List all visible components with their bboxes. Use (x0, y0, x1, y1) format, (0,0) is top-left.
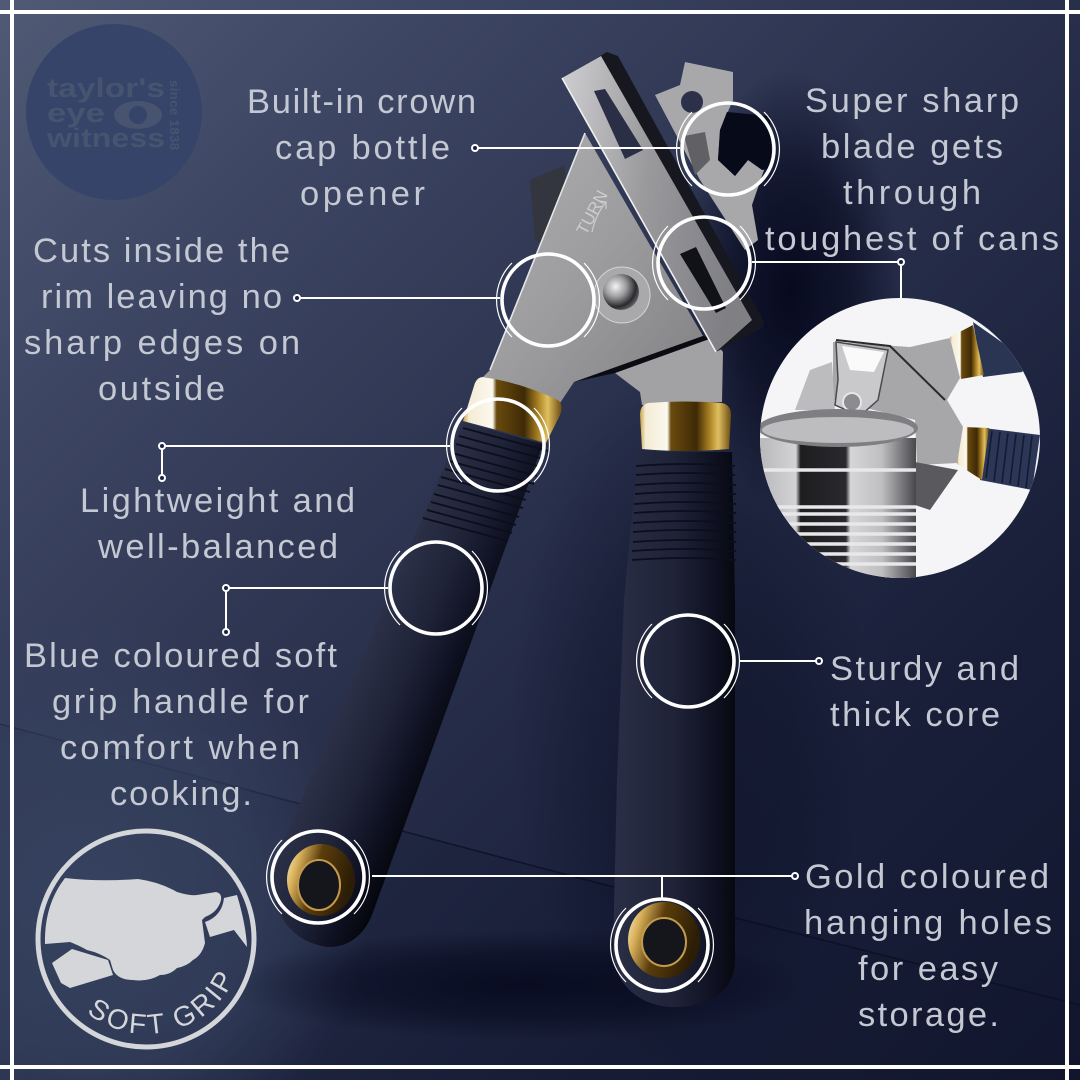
right ribs (632, 464, 736, 560)
text: outside (98, 370, 225, 408)
text: well-balanced (97, 528, 338, 566)
text (830, 650, 1019, 734)
brand logo (26, 24, 202, 200)
text: blade gets (821, 128, 1003, 166)
inset photo: opener on a can (758, 298, 1040, 578)
text: thick core (830, 696, 1000, 734)
cutter wheel (835, 342, 888, 416)
text: comfort when (60, 729, 300, 767)
text: for easy (858, 950, 999, 988)
slot upper (594, 89, 643, 159)
callout: sturdy core (637, 615, 1019, 734)
text: toughest of cans (765, 220, 1059, 258)
text: opener (300, 175, 425, 213)
callout: cuts inside the rim (24, 232, 599, 408)
upper gold ferrule (950, 325, 984, 379)
can rim (758, 409, 918, 447)
brand logo: eye (47, 98, 105, 128)
main plate (480, 133, 703, 403)
cutter head (655, 62, 764, 250)
right handle (613, 452, 735, 1007)
text: grip handle for (52, 683, 309, 721)
brand logo: witness (46, 123, 165, 153)
text: Built-in crown (247, 83, 476, 121)
upper handle (973, 322, 1023, 377)
can body (760, 438, 916, 578)
text: storage. (858, 996, 999, 1034)
callout: sharp blade (653, 82, 1059, 309)
top band (562, 52, 764, 352)
text (24, 232, 300, 408)
text: sharp edges on (24, 324, 300, 362)
lower gold ferrule (957, 427, 989, 480)
text: Gold coloured (805, 858, 1049, 896)
rear bracket (530, 165, 566, 248)
text: cap bottle (275, 129, 450, 167)
brand logo: taylor's (47, 73, 165, 103)
slot lower (680, 247, 726, 313)
gear wheel (634, 171, 686, 223)
text: hanging holes (804, 904, 1052, 942)
leader line (752, 262, 901, 298)
text (804, 858, 1052, 1034)
text: through (843, 174, 981, 212)
text (247, 83, 476, 213)
embossed TURN mark: TURN (573, 187, 612, 238)
rivet (594, 267, 650, 323)
brand logo: since 1838 (167, 80, 182, 150)
callout: gold hanging holes (267, 831, 1052, 1034)
right hanging hole (628, 902, 700, 978)
left hanging hole (287, 844, 355, 916)
text: Super sharp (805, 82, 1019, 120)
badge label: SOFT GRIP (89, 972, 228, 1034)
leader line (740, 660, 819, 662)
text (765, 82, 1059, 258)
leader line (298, 297, 500, 299)
callout: crown cap bottle opener (247, 83, 779, 213)
text: Sturdy and (830, 650, 1019, 688)
text (24, 637, 337, 813)
left ribs (423, 428, 548, 541)
text: Lightweight and (80, 482, 355, 520)
soft grip badge (36, 828, 256, 1050)
text: Blue coloured soft (24, 637, 337, 675)
text: Cuts inside the (33, 232, 290, 270)
text: cooking. (110, 775, 252, 813)
right gold ferrule (640, 402, 731, 451)
hand icon (45, 878, 247, 988)
left handle (273, 422, 543, 947)
opener body (833, 338, 963, 465)
callout: soft grip handle (24, 542, 487, 813)
can opener (273, 52, 772, 1007)
leader line (476, 147, 680, 149)
left gold ferrule (463, 377, 562, 443)
lower right plate (615, 338, 723, 405)
text (80, 482, 355, 566)
leader line (372, 876, 795, 898)
text: rim leaving no (41, 278, 282, 316)
leader line (226, 588, 388, 632)
leader line (162, 446, 450, 478)
lower handle (980, 428, 1040, 490)
callout: lightweight and balanced (80, 399, 549, 566)
